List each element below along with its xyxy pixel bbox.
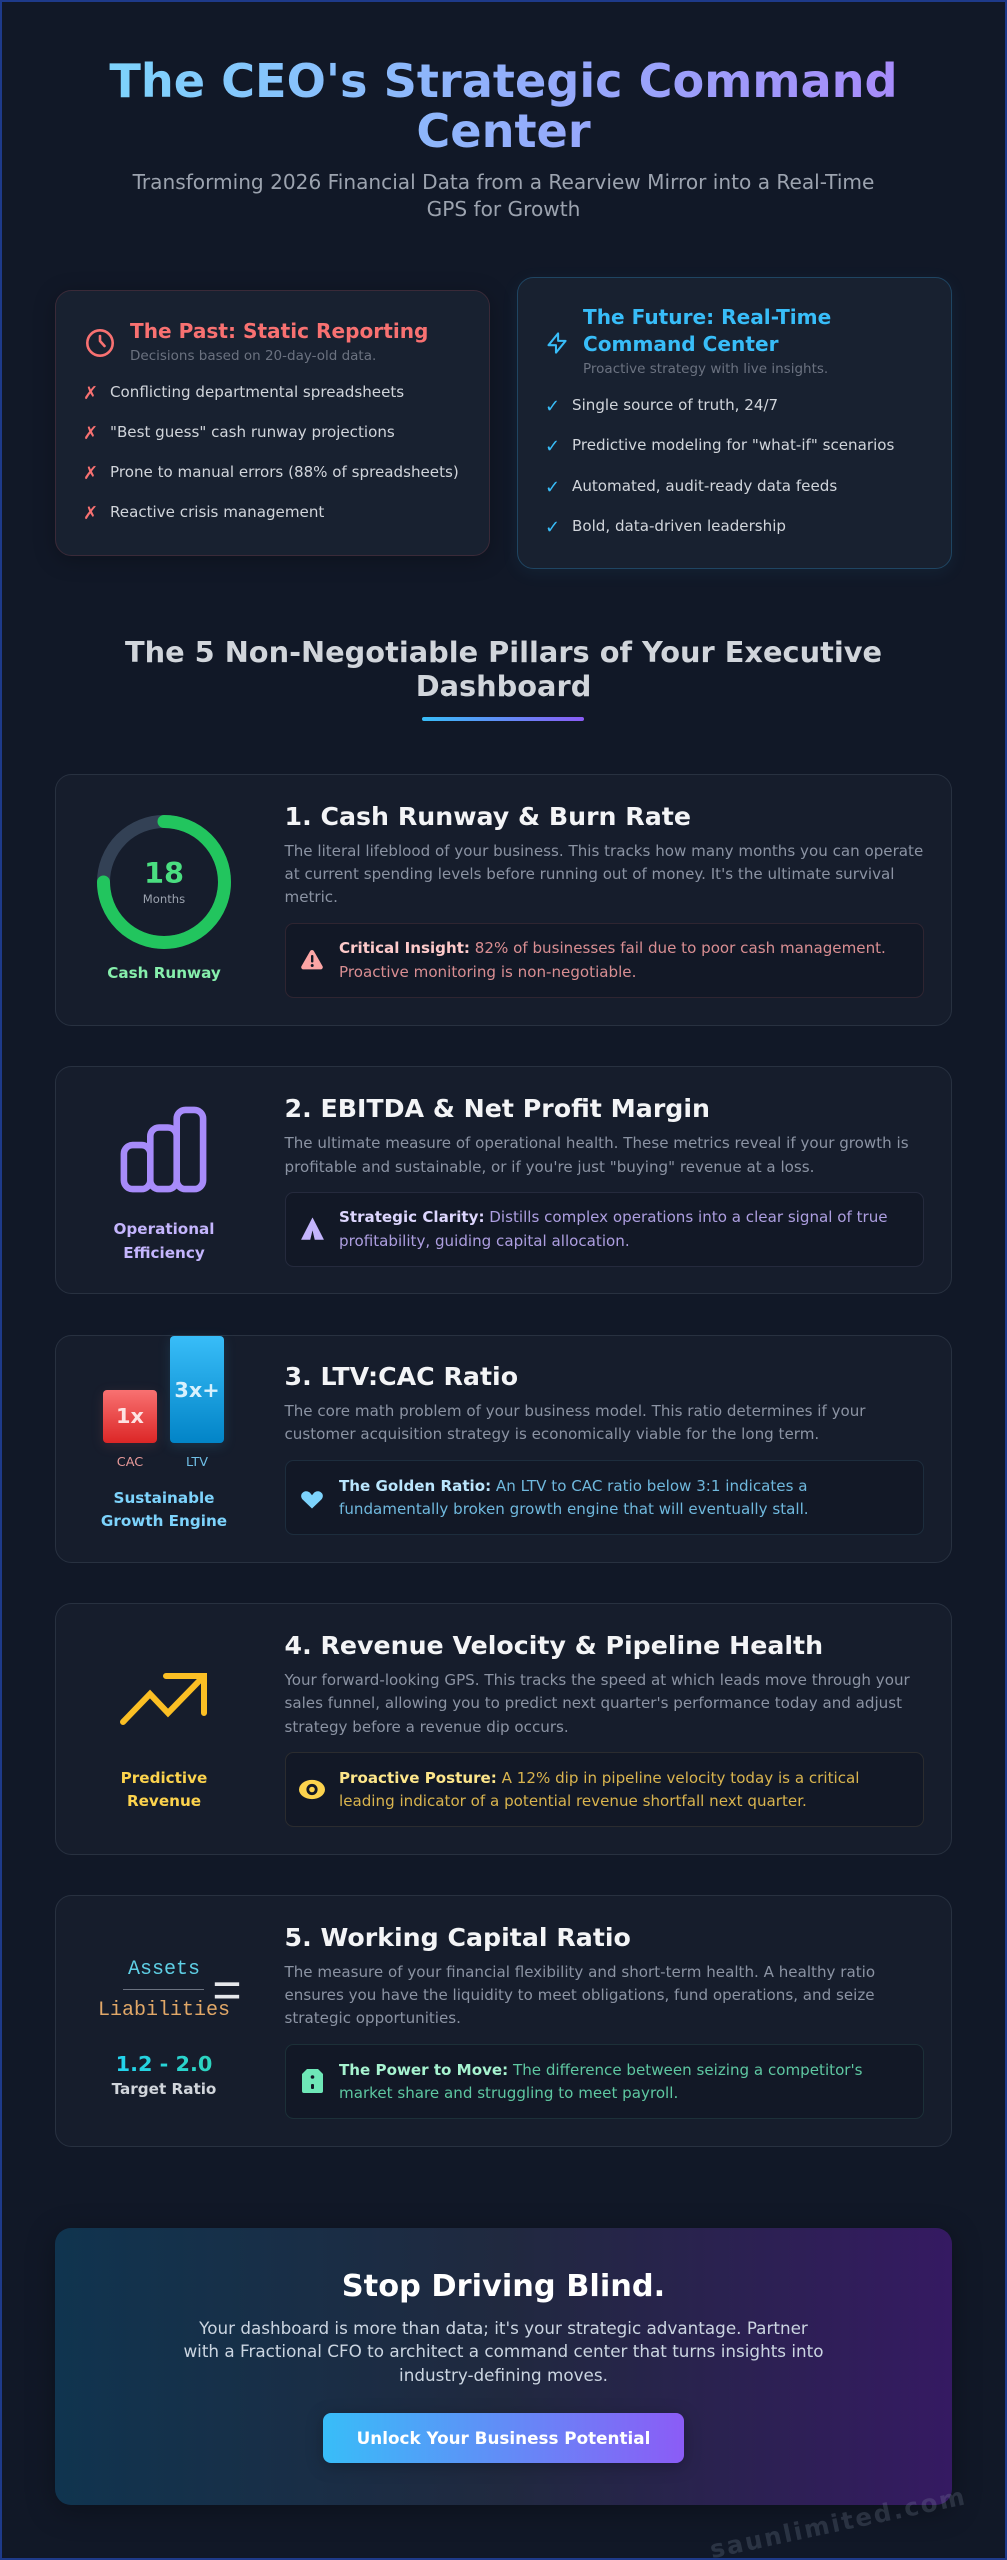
icon: heart	[301, 1491, 323, 1508]
visual label: Efficiency	[123, 1244, 205, 1262]
future subheading: Proactive strategy with live insights.	[583, 361, 828, 377]
callout text: The Power to Move: The difference between seizing a competitor's	[339, 2061, 863, 2079]
visual label	[121, 1769, 207, 1810]
donut chart: 18 months: Months	[143, 892, 185, 906]
callout text	[339, 939, 886, 981]
ratio formula: =	[212, 1966, 242, 2023]
pillar description: The literal lifeblood of your business. This tracks how many months you can operate	[284, 842, 923, 860]
target ratio value: 1.2 - 2.0	[116, 2052, 212, 2076]
callout text: Proactive Posture: A 12% dip in pipeline velocity today is a critical	[339, 1769, 859, 1787]
cta text: with a Fractional CFO to architect a command center that turns insights into	[183, 2341, 824, 2361]
callout text: Critical Insight: 82% of businesses fail due to poor cash management.	[339, 939, 886, 957]
future list: ✓	[545, 477, 560, 498]
future list: Single source of truth, 24/7	[572, 396, 778, 414]
visual label: Revenue	[127, 1792, 201, 1810]
bar chart: cac vs ltv: LTV	[186, 1455, 208, 1470]
pillar description: The measure of your financial flexibility and short-term health. A healthy ratio	[284, 1963, 875, 1981]
callout text	[339, 1208, 888, 1250]
panel: pillar 5 working capital	[56, 1896, 952, 2146]
visual label: Sustainable	[114, 1489, 214, 1507]
icon: bar chart	[124, 1110, 203, 1189]
bar chart: cac vs ltv	[103, 1336, 224, 1470]
past list: "Best guess" cash runway projections	[110, 423, 395, 441]
bar chart: cac vs ltv: 3x+	[174, 1378, 220, 1402]
callout text: fundamentally broken growth engine that will eventually stall.	[339, 1500, 809, 1518]
pillar heading: 3. LTV:CAC Ratio	[284, 1362, 518, 1391]
pillar heading: 4. Revenue Velocity & Pipeline Health	[284, 1631, 823, 1660]
pillar description: customer acquisition strategy is economically viable for the long term.	[284, 1425, 819, 1443]
panel: call to action	[55, 2228, 952, 2505]
callout: golden ratio	[286, 1460, 924, 1534]
callout text	[339, 2061, 863, 2102]
cta button	[323, 2413, 684, 2463]
past list: ✗	[83, 383, 98, 404]
callout: proactive posture	[286, 1752, 924, 1826]
icon: lock	[302, 2069, 323, 2093]
visual label: Operational	[114, 1220, 214, 1238]
callout: power to move	[286, 2044, 924, 2118]
callout: critical insight	[286, 924, 924, 998]
panel: pillar 3 ltv cac	[56, 1336, 952, 1562]
future list: ✓	[545, 436, 560, 457]
visual label: Growth Engine	[101, 1512, 227, 1530]
target ratio label: Target Ratio	[112, 2080, 216, 2098]
future list: Bold, data-driven leadership	[572, 517, 786, 535]
callout: strategic clarity	[286, 1192, 924, 1266]
panel: the past	[56, 290, 490, 556]
pillar description: strategy before a revenue dip occurs.	[284, 1718, 569, 1736]
cta heading: Stop Driving Blind.	[342, 2269, 665, 2304]
callout text: Strategic Clarity: Distills complex operations into a clear signal of true	[339, 1208, 888, 1226]
icon: navigation arrow	[302, 1218, 324, 1240]
visual label	[114, 1220, 214, 1262]
subtitle: GPS for Growth	[427, 197, 580, 221]
donut chart: 18 months: 18	[144, 856, 184, 890]
callout text: The Golden Ratio: An LTV to CAC ratio below 3:1 indicates a	[339, 1477, 807, 1495]
panel: pillar 4 revenue velocity	[56, 1604, 952, 1854]
future heading	[583, 305, 831, 356]
pillar description: ensures you have the liquidity to meet obligations, fund operations, and seize	[284, 1986, 875, 2004]
future list: ✓	[545, 517, 560, 538]
past subheading: Decisions based on 20-day-old data.	[130, 348, 376, 364]
future list: ✓	[545, 396, 560, 417]
visual label	[101, 1489, 227, 1530]
callout text	[339, 1477, 809, 1518]
icon: lightning bolt	[548, 333, 566, 353]
callout text: market share and struggling to meet payroll.	[339, 2084, 678, 2102]
icon: clock	[87, 330, 113, 356]
pillar description: The core math problem of your business model. This ratio determines if your	[284, 1402, 866, 1420]
past list: ✗	[83, 503, 98, 524]
future list	[545, 396, 894, 538]
pillar description: profitable and sustainable, or if you're just "buying" revenue at a loss.	[284, 1158, 814, 1176]
section heading: The 5 Non-Negotiable Pillars of Your Executive	[125, 635, 882, 669]
future heading: Command Center	[583, 332, 779, 356]
pillar heading: 2. EBITDA & Net Profit Margin	[284, 1094, 710, 1123]
title	[109, 54, 898, 158]
ratio formula: Assets	[128, 1958, 200, 1981]
future heading: The Future: Real-Time	[583, 305, 831, 329]
callout text: Proactive monitoring is non-negotiable.	[339, 963, 636, 981]
section heading	[125, 635, 882, 721]
pillar description: Your forward-looking GPS. This tracks the speed at which leads move through your	[284, 1671, 911, 1689]
icon: trending arrow	[123, 1676, 204, 1722]
past list: ✗	[83, 423, 98, 444]
header	[109, 54, 898, 221]
past list	[83, 383, 459, 524]
past list: Conflicting departmental spreadsheets	[110, 383, 404, 401]
callout text: profitability, guiding capital allocation.	[339, 1232, 630, 1250]
icon: eye	[299, 1780, 325, 1799]
pillar description: metric.	[284, 888, 338, 906]
panel: the future	[518, 278, 952, 568]
pillar description	[284, 1963, 875, 2027]
pillar heading: 1. Cash Runway & Burn Rate	[284, 802, 691, 831]
past heading: The Past: Static Reporting	[130, 319, 428, 343]
cta text: Your dashboard is more than data; it's your strategic advantage. Partner	[198, 2318, 808, 2338]
bar chart: cac vs ltv: 1x	[116, 1404, 145, 1428]
pillar description: The ultimate measure of operational health. These metrics reveal if your growth is	[284, 1134, 909, 1152]
pillar description: at current spending levels before running out of money. It's the ultimate survival	[284, 865, 894, 883]
title: Center	[416, 104, 591, 158]
pillar description	[284, 1134, 909, 1176]
pillar description	[284, 1402, 866, 1443]
panel: pillar 1 cash runway	[56, 774, 952, 1026]
visual label: Cash Runway	[107, 964, 221, 982]
callout text: leading indicator of a potential revenue shortfall next quarter.	[339, 1792, 807, 1810]
pillar description	[284, 842, 923, 906]
bar chart: cac vs ltv: CAC	[117, 1455, 143, 1470]
section heading: Dashboard	[416, 669, 591, 703]
subtitle	[132, 170, 874, 221]
pillar description: strategic opportunities.	[284, 2009, 461, 2027]
donut chart: 18 months	[104, 822, 224, 942]
title: The CEO's Strategic Command	[109, 54, 898, 108]
cta text	[183, 2318, 824, 2385]
past list: Reactive crisis management	[110, 503, 324, 521]
cta button: Unlock Your Business Potential	[357, 2428, 650, 2448]
icon: warning	[301, 950, 323, 969]
subtitle: Transforming 2026 Financial Data from a Rearview Mirror into a Real-Time	[132, 170, 874, 194]
past list: Prone to manual errors (88% of spreadsheets)	[110, 463, 459, 481]
past list: ✗	[83, 463, 98, 484]
pillar description	[284, 1671, 911, 1736]
ratio formula: Liabilities	[98, 1999, 230, 2022]
future list: Automated, audit-ready data feeds	[572, 477, 837, 495]
cta text: industry-defining moves.	[399, 2365, 608, 2385]
heading underline	[422, 717, 584, 721]
future list: Predictive modeling for "what-if" scenarios	[572, 436, 894, 454]
ratio formula	[98, 1958, 242, 2023]
panel: pillar 2 ebitda	[56, 1066, 952, 1294]
callout text	[339, 1769, 859, 1810]
visual label: Predictive	[121, 1769, 207, 1787]
pillar description: sales funnel, allowing you to predict next quarter's performance today and adjust	[284, 1694, 902, 1712]
pillar heading: 5. Working Capital Ratio	[284, 1923, 631, 1952]
